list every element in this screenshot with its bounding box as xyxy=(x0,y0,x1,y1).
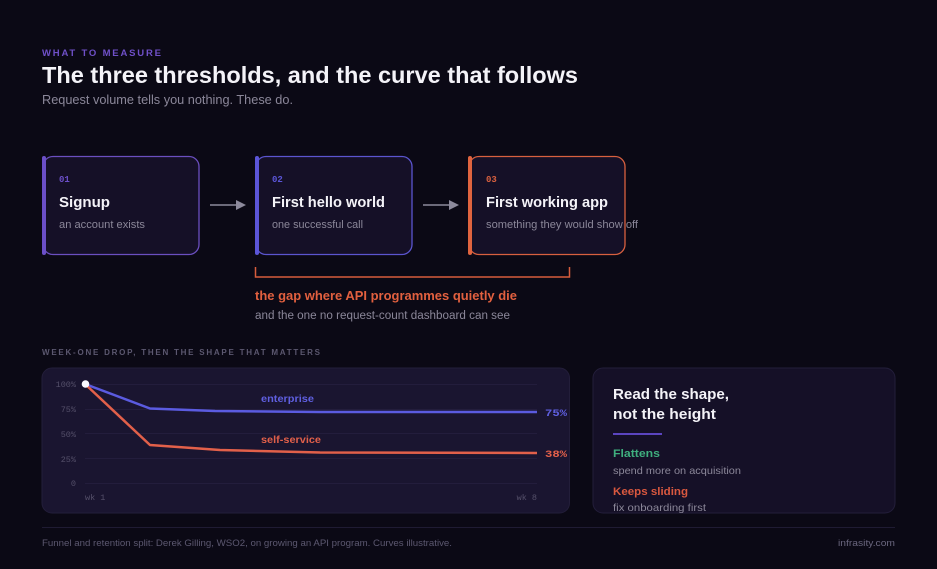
card: first hello world: First hello world xyxy=(272,194,385,211)
card: signup xyxy=(42,156,199,255)
y axis labels: 75% xyxy=(61,405,77,415)
panel: retention chart xyxy=(42,368,570,513)
title: The three thresholds, and the curve that follows xyxy=(42,62,578,88)
footer: infrasity.com xyxy=(838,538,895,549)
panel heading: not the height xyxy=(613,407,716,423)
card: first hello world: 02 xyxy=(272,175,283,185)
eyebrow: WHAT TO MEASURE xyxy=(42,48,161,59)
panel heading xyxy=(613,387,729,423)
card: first hello world xyxy=(255,156,412,255)
callout: gap text: the gap where API programmes quietly die xyxy=(255,289,517,303)
callout: gap text xyxy=(255,289,517,322)
x axis labels: wk 1 xyxy=(85,493,105,503)
flattens: spend more on acquisition xyxy=(613,465,741,477)
flattens xyxy=(613,448,741,477)
start dot xyxy=(82,380,89,388)
bracket: gap xyxy=(256,267,570,277)
panel heading: Read the shape, xyxy=(613,387,729,403)
panel: retention chart: self-service xyxy=(261,434,321,446)
card: first working app: First working app xyxy=(486,194,608,211)
y axis labels: 100% xyxy=(56,380,77,390)
card: signup: 01 xyxy=(59,175,70,185)
series labels: enterprise xyxy=(261,393,314,405)
arrow: hello world to working app xyxy=(423,200,459,210)
card: signup: Signup xyxy=(59,194,110,211)
line: self-service xyxy=(85,384,537,453)
card: first working app xyxy=(468,156,639,255)
card: signup: an account exists xyxy=(59,219,145,231)
arrow: signup to hello world xyxy=(210,200,246,210)
y axis labels xyxy=(56,380,77,489)
section heading: WEEK-ONE DROP, THEN THE SHAPE THAT MATTERS xyxy=(42,348,321,357)
keeps sliding: fix onboarding first xyxy=(613,502,706,514)
card: first working app: something they would show off xyxy=(486,219,639,231)
card: first hello world: one successful call xyxy=(272,219,363,231)
y axis labels: 0 xyxy=(71,479,76,489)
card: first working app: 03 xyxy=(486,175,497,185)
panel: retention chart: wk 8 xyxy=(517,493,537,503)
footer: Funnel and retention split: Derek Gilling, WSO2, on growing an API program. Curves illustrative. xyxy=(42,538,452,549)
flattens: Flattens xyxy=(613,448,660,460)
end values: 75% xyxy=(545,408,568,420)
line: enterprise xyxy=(85,384,537,412)
keeps sliding: Keeps sliding xyxy=(613,486,688,498)
panel: read the shape xyxy=(593,368,895,514)
keeps sliding xyxy=(613,486,706,514)
y axis labels: 50% xyxy=(61,430,77,440)
y axis labels: 25% xyxy=(61,455,77,465)
header xyxy=(42,48,578,107)
panel: retention chart: 38% xyxy=(545,449,568,461)
callout: gap text: and the one no request-count dashboard can see xyxy=(255,310,510,322)
subtitle: Request volume tells you nothing. These do. xyxy=(42,93,293,107)
footer xyxy=(42,528,895,549)
